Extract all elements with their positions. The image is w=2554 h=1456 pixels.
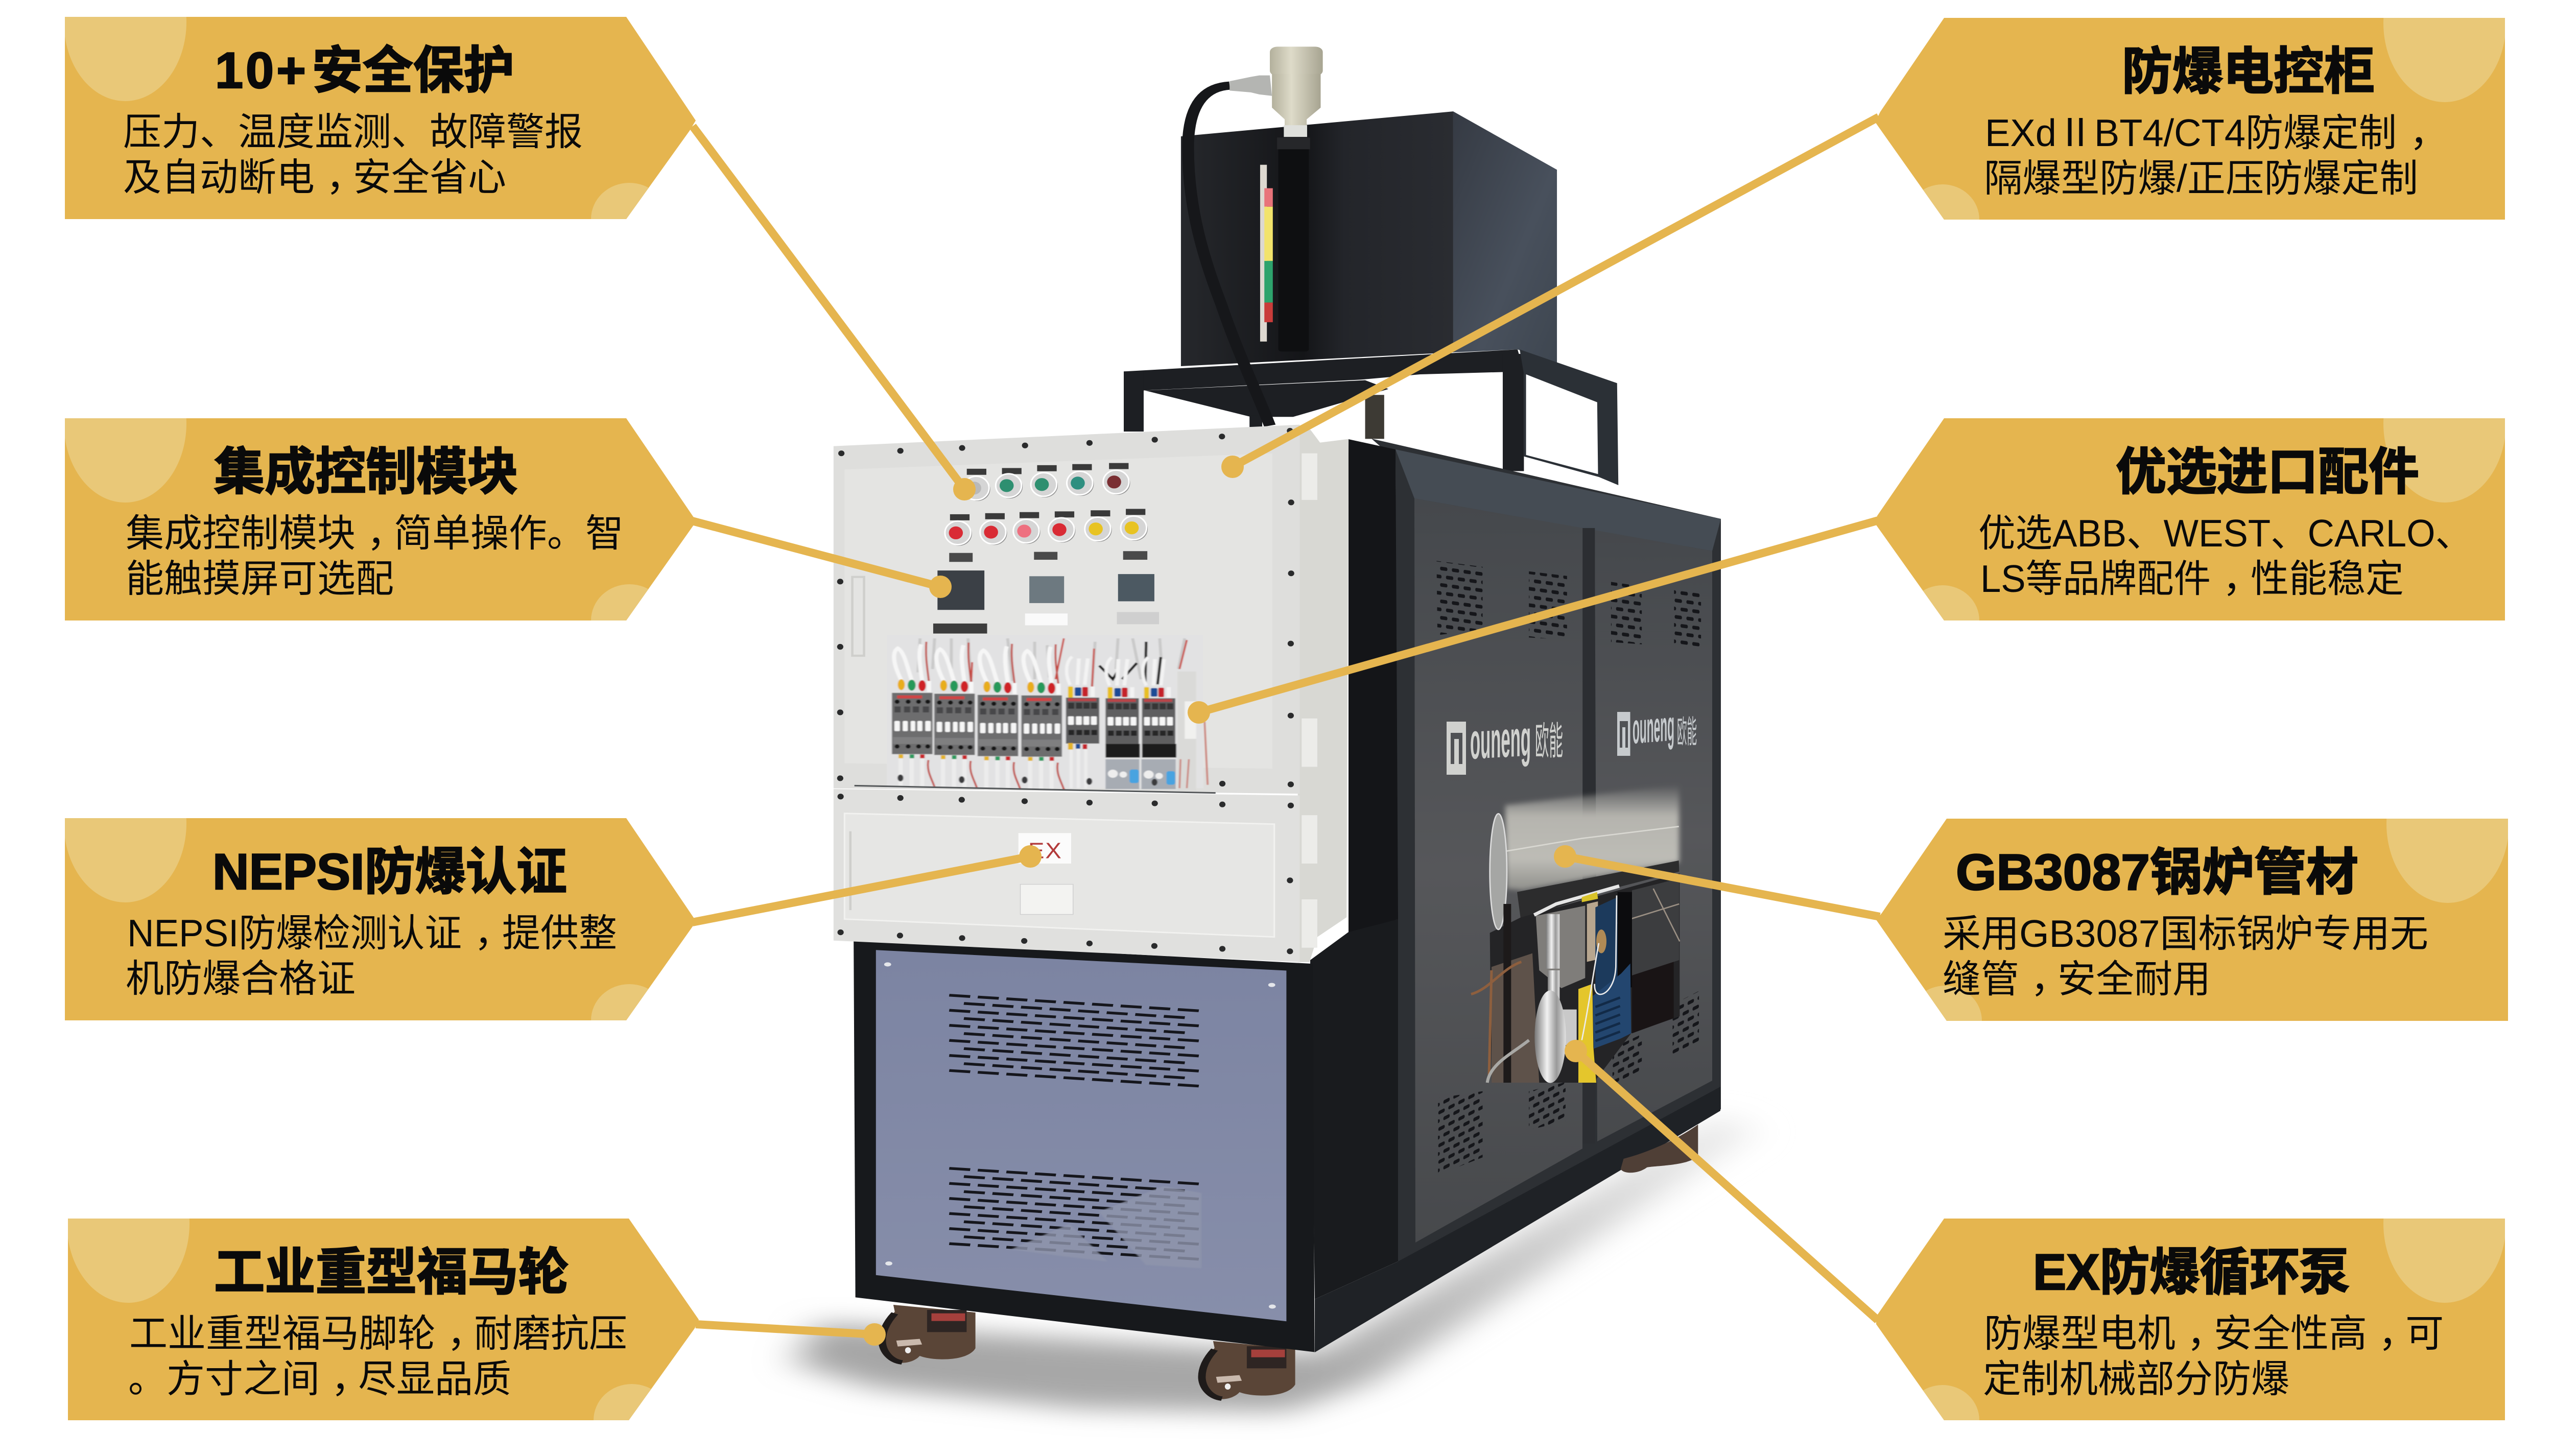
indicator lamps top row (963, 470, 1130, 501)
bracket plate (1587, 901, 1598, 962)
heading: EX防爆循环泵 (2033, 1244, 2350, 1300)
level pipe (1279, 143, 1309, 351)
body line one: 采用GB3087国标锅炉专用无 (1943, 912, 2428, 955)
support frame (1124, 349, 1618, 485)
thermal relay one (1105, 759, 1139, 789)
body text: 。方寸之间 ，尽显品质 (128, 1357, 511, 1400)
digital meter two (1029, 576, 1064, 603)
grey right bay (1632, 878, 1679, 975)
tube flange (1490, 814, 1507, 929)
body line one: ， (474, 912, 512, 954)
door vents (1436, 528, 1701, 1175)
cabinet side (1298, 425, 1349, 962)
dark lower bay (1632, 962, 1674, 1033)
meter tags (949, 551, 1147, 562)
white cables (1582, 895, 1617, 1040)
left door (1414, 498, 1583, 1243)
rear caster (1621, 1125, 1698, 1173)
hinges (1302, 453, 1317, 948)
vent patches (1011, 1186, 1201, 1268)
heading: 优选进口配件 (2116, 443, 2419, 500)
cabinet seam (855, 785, 1216, 793)
body text: 能触摸屏可选配 (126, 557, 394, 600)
machine: right side body (1310, 439, 1721, 1352)
machine: oil tank and support frame (1124, 46, 1618, 485)
contactor 2 (934, 642, 977, 788)
contactor 3 (978, 644, 1020, 790)
foil insulation (1536, 905, 1585, 988)
top second vent (1529, 571, 1567, 640)
door seam (1582, 528, 1595, 1144)
copper pipes (1471, 962, 1521, 1076)
black strap (1503, 904, 1511, 1083)
Ex nameplate (1019, 833, 1071, 864)
machine: right side body: ouneng (1633, 702, 1674, 753)
panel: heavy duty casters (68, 1219, 699, 1420)
din relay (1177, 672, 1196, 791)
top left vent (1436, 561, 1482, 635)
leader lines and dots (692, 117, 1880, 1346)
panel: explosion-proof control cabinet (1876, 18, 2505, 220)
body line two: 机防爆合格证 (126, 957, 356, 1000)
body text: 防爆型电机 ，安全性高 ，可 (1984, 1312, 2444, 1355)
silver return pipe (1487, 1040, 1529, 1083)
lower second vent (1529, 1082, 1566, 1130)
black lower wall (1310, 919, 1398, 1299)
flexible hose (1188, 86, 1270, 426)
control cabinet (834, 425, 1349, 962)
body line two (1980, 557, 2404, 600)
body line two: 缝管 ，安全耐用 (1943, 958, 2211, 1000)
lower markers (1068, 743, 1087, 750)
pump coupling (1559, 1010, 1577, 1045)
body line two: 性能稳定 (2251, 557, 2404, 600)
top fourth vent (1674, 589, 1701, 647)
motor body (1593, 964, 1631, 1048)
specification plate (1021, 885, 1073, 915)
heading: 集成控制模块 (214, 443, 518, 500)
lower cabinet front (834, 789, 1299, 962)
contactor 1 (892, 642, 935, 787)
contactor 6 (1105, 657, 1139, 744)
front right caster (1200, 1341, 1295, 1399)
body line two: ， (2222, 557, 2261, 600)
black upright (1618, 892, 1632, 987)
junction box (1595, 897, 1618, 992)
blue-grey access panel (876, 950, 1286, 1321)
tube underside (1517, 861, 1679, 918)
body line two: LS等品牌配件 (1980, 557, 2211, 600)
lower recessed panel (844, 814, 1274, 937)
valve stem (1548, 970, 1559, 1003)
lower left vent (1438, 1091, 1482, 1175)
yellow tape (1582, 892, 1598, 902)
lower wires (1071, 746, 1086, 788)
loose wires behind (918, 638, 1185, 686)
window back (1490, 873, 1680, 1083)
panel: 10+ safety protection (65, 17, 696, 219)
black wires (1099, 642, 1161, 684)
window bolts (897, 775, 1157, 785)
leader: caster (696, 1323, 886, 1346)
body line two: 隔爆型防爆/正压防爆定制 (1984, 157, 2418, 200)
upper vent (949, 995, 1201, 1086)
machine: right side body: ouneng (1470, 709, 1531, 770)
contactor 5 (1066, 657, 1099, 744)
explosion-proof sensor head (1229, 46, 1323, 149)
heading: NEPSI防爆认证 (212, 843, 567, 900)
machine: lower front housing and casters (854, 940, 1698, 1399)
contactor cores (1105, 744, 1176, 757)
tank front face (1181, 111, 1453, 366)
contactor 4 (1021, 645, 1064, 790)
panel: imported parts (1876, 418, 2505, 620)
lower vent (949, 1168, 1201, 1259)
meter control strips (933, 612, 1159, 634)
leader: control cabinet (1221, 117, 1879, 478)
pump volute (1534, 990, 1566, 1083)
front black frame (854, 940, 1315, 1352)
pushbutton labels (950, 463, 1145, 520)
valve (1546, 914, 1559, 969)
flange bolts (837, 428, 1294, 954)
body line one: 提供整 (502, 912, 617, 954)
brand logo box right (1617, 712, 1630, 756)
indicator lamps bottom row (945, 516, 1148, 546)
ground shadow (794, 1114, 1756, 1412)
red wires behind (971, 638, 1187, 688)
panel: integrated control module (65, 418, 694, 620)
leader: boiler tube (1554, 845, 1880, 917)
brand logo box left (1447, 722, 1466, 775)
body line one: 优选ABB、WEST、CARLO、 (1978, 512, 2472, 555)
Ex nameplate: EX (1028, 838, 1061, 863)
digital meter one (937, 570, 984, 610)
machine: right side body: 欧能 (1535, 720, 1563, 763)
side shell (1371, 439, 1721, 1282)
thermal relay two (1141, 759, 1176, 789)
body text: 压力、温度监测、故障警报 (123, 110, 583, 153)
contactor 7 (1142, 657, 1175, 744)
right red wires (1179, 722, 1208, 788)
heading: GB3087锅炉管材 (1956, 844, 2358, 900)
heading: 防爆电控柜 (2122, 43, 2375, 100)
brown floor (1492, 953, 1539, 1083)
brace rods (1613, 889, 1680, 941)
level gauge (1260, 165, 1273, 342)
heading: 10+安全保护 (215, 42, 514, 99)
leader: NEPSI (692, 845, 1042, 922)
central connecting pipe (1365, 395, 1384, 439)
right door (1595, 530, 1712, 1141)
panel screws (884, 962, 1276, 1308)
yellow motor flange (1578, 984, 1596, 1083)
base rail (1315, 1087, 1720, 1352)
cabinet handles (850, 577, 864, 910)
tube weld seam (1506, 826, 1679, 851)
body line one: EXdⅡBT4/CT4防爆定制 (1985, 102, 2397, 157)
body text: 工业重型福马脚轮 ，耐磨抗压 (129, 1312, 627, 1355)
lower fourth vent (1672, 991, 1699, 1057)
leader: safety protection (693, 126, 976, 500)
panel: GB3087 boiler tube (1877, 819, 2508, 1021)
front left caster (880, 1305, 976, 1363)
panel: EX circulation pump (1876, 1219, 2505, 1420)
pump window cutaway (1471, 785, 1680, 1083)
panel: NEPSI certification (65, 818, 694, 1020)
top band (1396, 449, 1721, 551)
leader: pump (1565, 1040, 1878, 1320)
foil highlight band (1534, 886, 1619, 915)
contactor wiring window (855, 635, 1216, 793)
digital meter three (1118, 574, 1154, 601)
top third vent (1611, 582, 1642, 645)
tank side face (1453, 111, 1557, 363)
upper cabinet front (834, 425, 1299, 794)
body text: 集成控制模块 ，简单操作。智 (126, 512, 624, 555)
black column beside cabinet (1349, 439, 1398, 935)
body line one: ， (2409, 111, 2448, 154)
leader: imported parts (1188, 520, 1878, 724)
upper recessed panel (844, 453, 1272, 769)
body text: 及自动断电 ，安全省心 (123, 156, 506, 199)
body line one: NEPSI防爆检测认证 (127, 912, 462, 954)
heading: 工业重型福马轮 (214, 1244, 569, 1300)
lower third vent (1613, 1034, 1642, 1084)
machine: right side body: 欧能 (1677, 714, 1697, 750)
boiler tube (1505, 785, 1679, 890)
motor fins (1595, 997, 1620, 1041)
terminal gland (1596, 929, 1606, 953)
leader: integrated control (692, 521, 952, 598)
body text: 定制机械部分防爆 (1983, 1357, 2289, 1400)
